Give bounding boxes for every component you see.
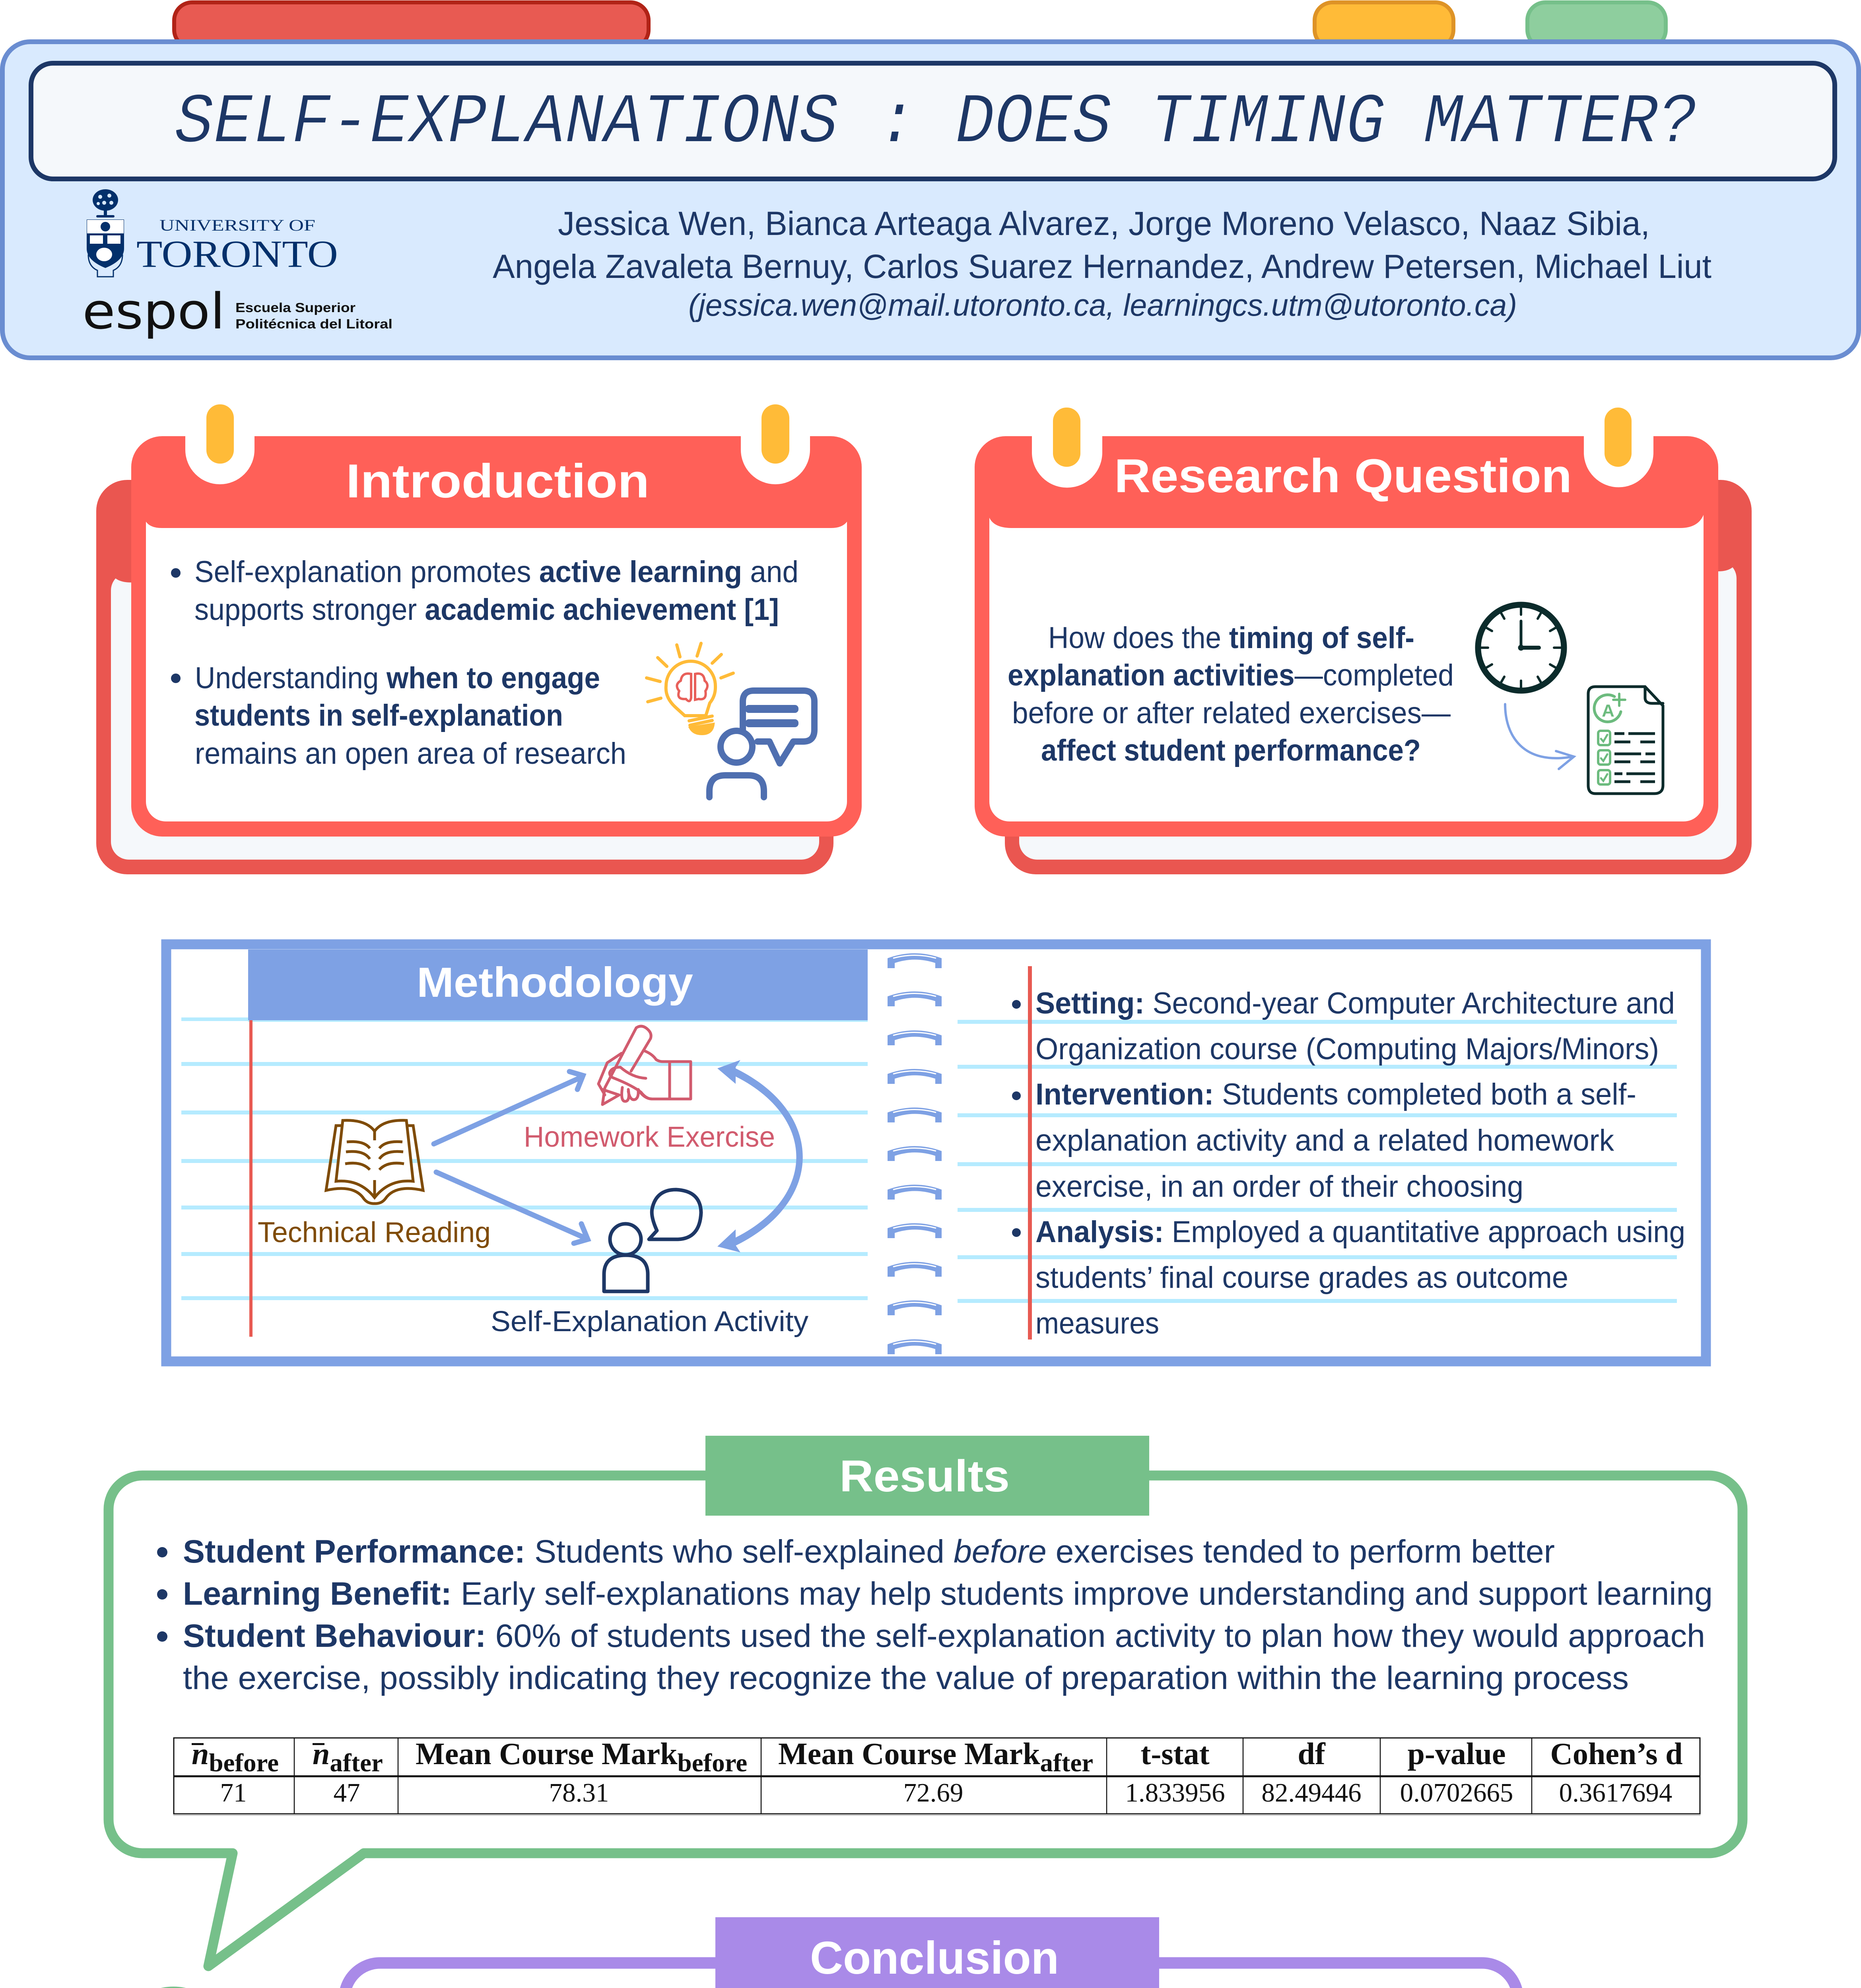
logo: ESPOL: espol: [82, 283, 225, 340]
heading: research question: Research Question: [1114, 449, 1572, 503]
notebook margin lines: [249, 966, 1032, 1340]
calendar front page: [975, 408, 1718, 837]
heading: conclusion: Conclusion: [810, 1932, 1059, 1984]
methodology details: exercise, in an order of their choosing: [1035, 1170, 1523, 1204]
intro bullets: [171, 555, 798, 771]
logo: ESPOL: [82, 283, 392, 340]
calendar back page: [1005, 480, 1752, 874]
header tabs: [174, 2, 1666, 48]
label: self-explanation activity: Self-Explanation Activity: [491, 1306, 808, 1338]
icon: person with speech bubble: [709, 691, 814, 797]
results table: p-value: [1407, 1736, 1506, 1771]
results table: t-stat: [1140, 1736, 1210, 1771]
results table: Mean Course Mark: [416, 1736, 678, 1771]
calendar front page: [131, 404, 862, 837]
icon: graded worksheet: [1588, 687, 1663, 794]
authors: Angela Zavaleta Bernuy, Carlos Suarez Hernandez, Andrew Petersen, Michael Liut: [493, 248, 1711, 285]
authors: [493, 205, 1711, 322]
arrow: reading to self-explanation: [436, 1172, 588, 1243]
methodology details: measures: [1035, 1307, 1159, 1340]
methodology details: [1012, 986, 1685, 1340]
research question text: before or after related exercises—: [1012, 696, 1451, 730]
methodology details: students’ final course grades as outcome: [1035, 1261, 1568, 1295]
label: homework exercise: Homework Exercise: [524, 1121, 775, 1153]
research question text: explanation activities—completed: [1008, 658, 1454, 692]
intro bullets: remains an open area of research: [195, 737, 626, 771]
results table: [173, 1736, 1700, 1816]
results table: n: [192, 1736, 209, 1771]
results bullets: [157, 1534, 1713, 1696]
icon: lightbulb with brain: [647, 643, 733, 734]
logo: ESPOL: Politécnica del Litoral: [235, 316, 392, 331]
results heading tab: [705, 1436, 1149, 1516]
icon: person speaking: [604, 1190, 701, 1291]
arrow: homework and self-explanation cycle: [717, 1060, 803, 1252]
research question text: [1008, 621, 1454, 767]
authors: Jessica Wen, Bianca Arteaga Alvarez, Jorge Moreno Velasco, Naaz Sibia,: [558, 205, 1650, 242]
logo: ESPOL: Escuela Superior: [235, 300, 355, 315]
label: technical reading: Technical Reading: [258, 1217, 491, 1248]
notebook ruled lines: [181, 1017, 1677, 1303]
results bullets: the exercise, possibly indicating they recognize the value of preparation within the learning process: [183, 1660, 1629, 1696]
results table: before: [209, 1749, 279, 1777]
results table: 71: [220, 1778, 247, 1807]
results table: after: [1040, 1749, 1093, 1777]
intro bullets: Self-explanation promotes active learning and: [194, 555, 798, 589]
results table: 0.3617694: [1559, 1778, 1672, 1807]
logo: University of Toronto: [87, 189, 338, 277]
results table: Mean Course Mark: [778, 1736, 1040, 1771]
research question text: How does the timing of self-: [1048, 621, 1414, 655]
notebook spiral binding: [888, 953, 942, 1354]
panel: introduction: [96, 404, 862, 874]
speech bubble: [344, 1963, 1589, 1988]
results bullets: Student Performance: Students who self-explained before exercises tended to perform better: [183, 1534, 1555, 1570]
arrow: clock to worksheet: [1505, 704, 1574, 769]
notebook frame: [166, 944, 1706, 1361]
heading: introduction: Introduction: [346, 454, 649, 508]
icon: graded worksheet: A: [1602, 701, 1614, 720]
research question text: affect student performance?: [1041, 734, 1421, 767]
results table: df: [1298, 1736, 1326, 1771]
authors: (jessica.wen@mail.utoronto.ca, learningcs.utm@utoronto.ca): [688, 287, 1517, 322]
results table: n: [313, 1736, 330, 1771]
icon: open book: [326, 1120, 423, 1204]
results bullets: Learning Benefit: Early self-explanations may help students improve understanding and support learning: [183, 1576, 1713, 1612]
results table: Cohen’s d: [1550, 1736, 1683, 1771]
methodology details: Intervention: Students completed both a self-: [1035, 1077, 1636, 1111]
results table: 0.0702665: [1400, 1778, 1513, 1807]
heading band: [248, 949, 868, 1020]
speech bubble: [109, 1475, 1743, 1966]
methodology details: Setting: Second-year Computer Architecture and: [1035, 986, 1675, 1020]
methodology details: explanation activity and a related homework: [1035, 1124, 1614, 1157]
logo: University of Toronto: TORONTO: [136, 233, 338, 275]
logo: University of Toronto: UNIVERSITY OF: [159, 216, 315, 234]
results table: before: [678, 1749, 747, 1777]
panel: methodology: [166, 944, 1706, 1361]
results table: after: [330, 1749, 383, 1777]
arrow: reading to homework: [434, 1072, 583, 1144]
panel: header: [2, 42, 1859, 358]
icon: clock: [1478, 605, 1564, 691]
results table: 82.49446: [1261, 1778, 1362, 1807]
results table: 1.833956: [1125, 1778, 1225, 1807]
panel: conclusion: [344, 1917, 1777, 1988]
conclusion heading tab: [715, 1917, 1159, 1988]
calendar back page: [96, 480, 833, 874]
results bullets: Student Behaviour: 60% of students used the self-explanation activity to plan how they would approach: [183, 1618, 1705, 1654]
intro bullets: supports stronger academic achievement [1]: [194, 593, 779, 627]
intro bullets: students in self-explanation: [194, 699, 563, 732]
heading: methodology: Methodology: [417, 959, 693, 1006]
methodology details: Organization course (Computing Majors/Minors): [1035, 1032, 1659, 1066]
heading: results: Results: [839, 1451, 1010, 1501]
results table: 78.31: [549, 1778, 609, 1807]
methodology details: Analysis: Employed a quantitative approach using: [1035, 1215, 1685, 1249]
title box: [31, 63, 1835, 179]
intro bullets: Understanding when to engage: [195, 661, 600, 695]
results table: 47: [333, 1778, 360, 1807]
panel: results: [77, 1436, 1743, 1988]
results table: 72.69: [903, 1778, 963, 1807]
title: SELF-EXPLANATIONS : DOES TIMING MATTER?: [175, 83, 1697, 163]
icon: hand writing: [598, 1026, 691, 1105]
panel: research question: [975, 408, 1752, 874]
